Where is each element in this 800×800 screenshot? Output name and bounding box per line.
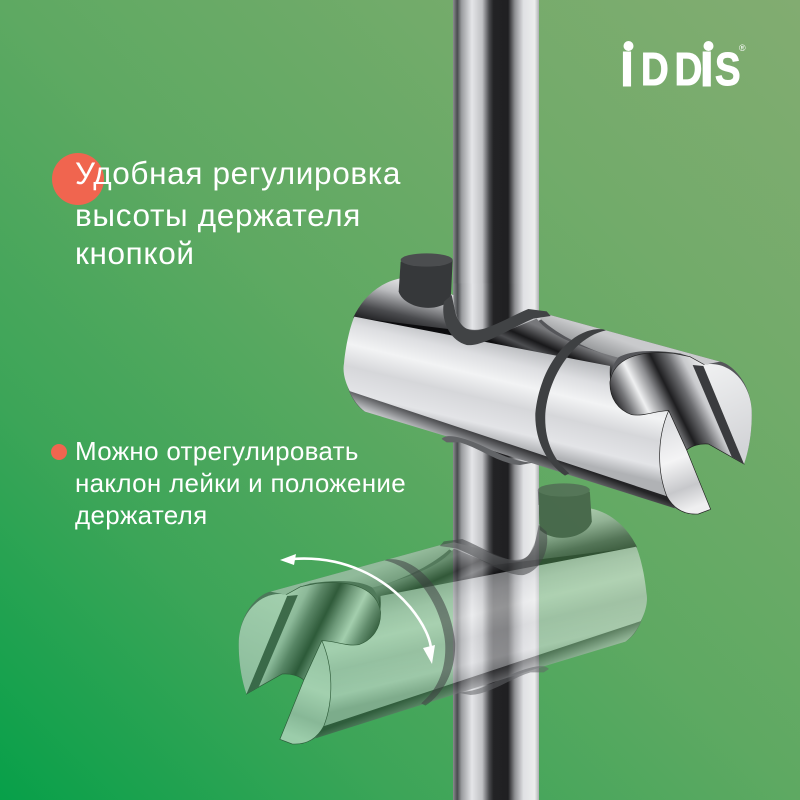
heading: высоты держателя — [75, 197, 361, 233]
body text: Можно отрегулировать — [75, 436, 359, 466]
rail showing through ghost holder — [453, 505, 539, 560]
heading: кнопкой — [75, 235, 195, 271]
rotation arrow — [280, 554, 435, 664]
ghost holder cord — [385, 525, 549, 706]
rail above cord — [453, 283, 539, 330]
bullet dot — [51, 444, 67, 460]
holder cord — [442, 295, 606, 476]
coral accent circle — [52, 153, 104, 205]
logo dots — [624, 41, 714, 51]
chrome holder (upper position) — [344, 253, 752, 514]
registered mark: ® — [739, 43, 746, 53]
heading: Удобная регулировка — [75, 155, 401, 191]
logo wordmark: IDDIS — [622, 44, 741, 95]
logo — [622, 41, 746, 95]
body text: держателя — [75, 500, 208, 530]
shower rail — [453, 0, 539, 800]
body text: наклон лейки и положение — [75, 468, 406, 498]
ghost holder (lower position) — [239, 483, 647, 744]
